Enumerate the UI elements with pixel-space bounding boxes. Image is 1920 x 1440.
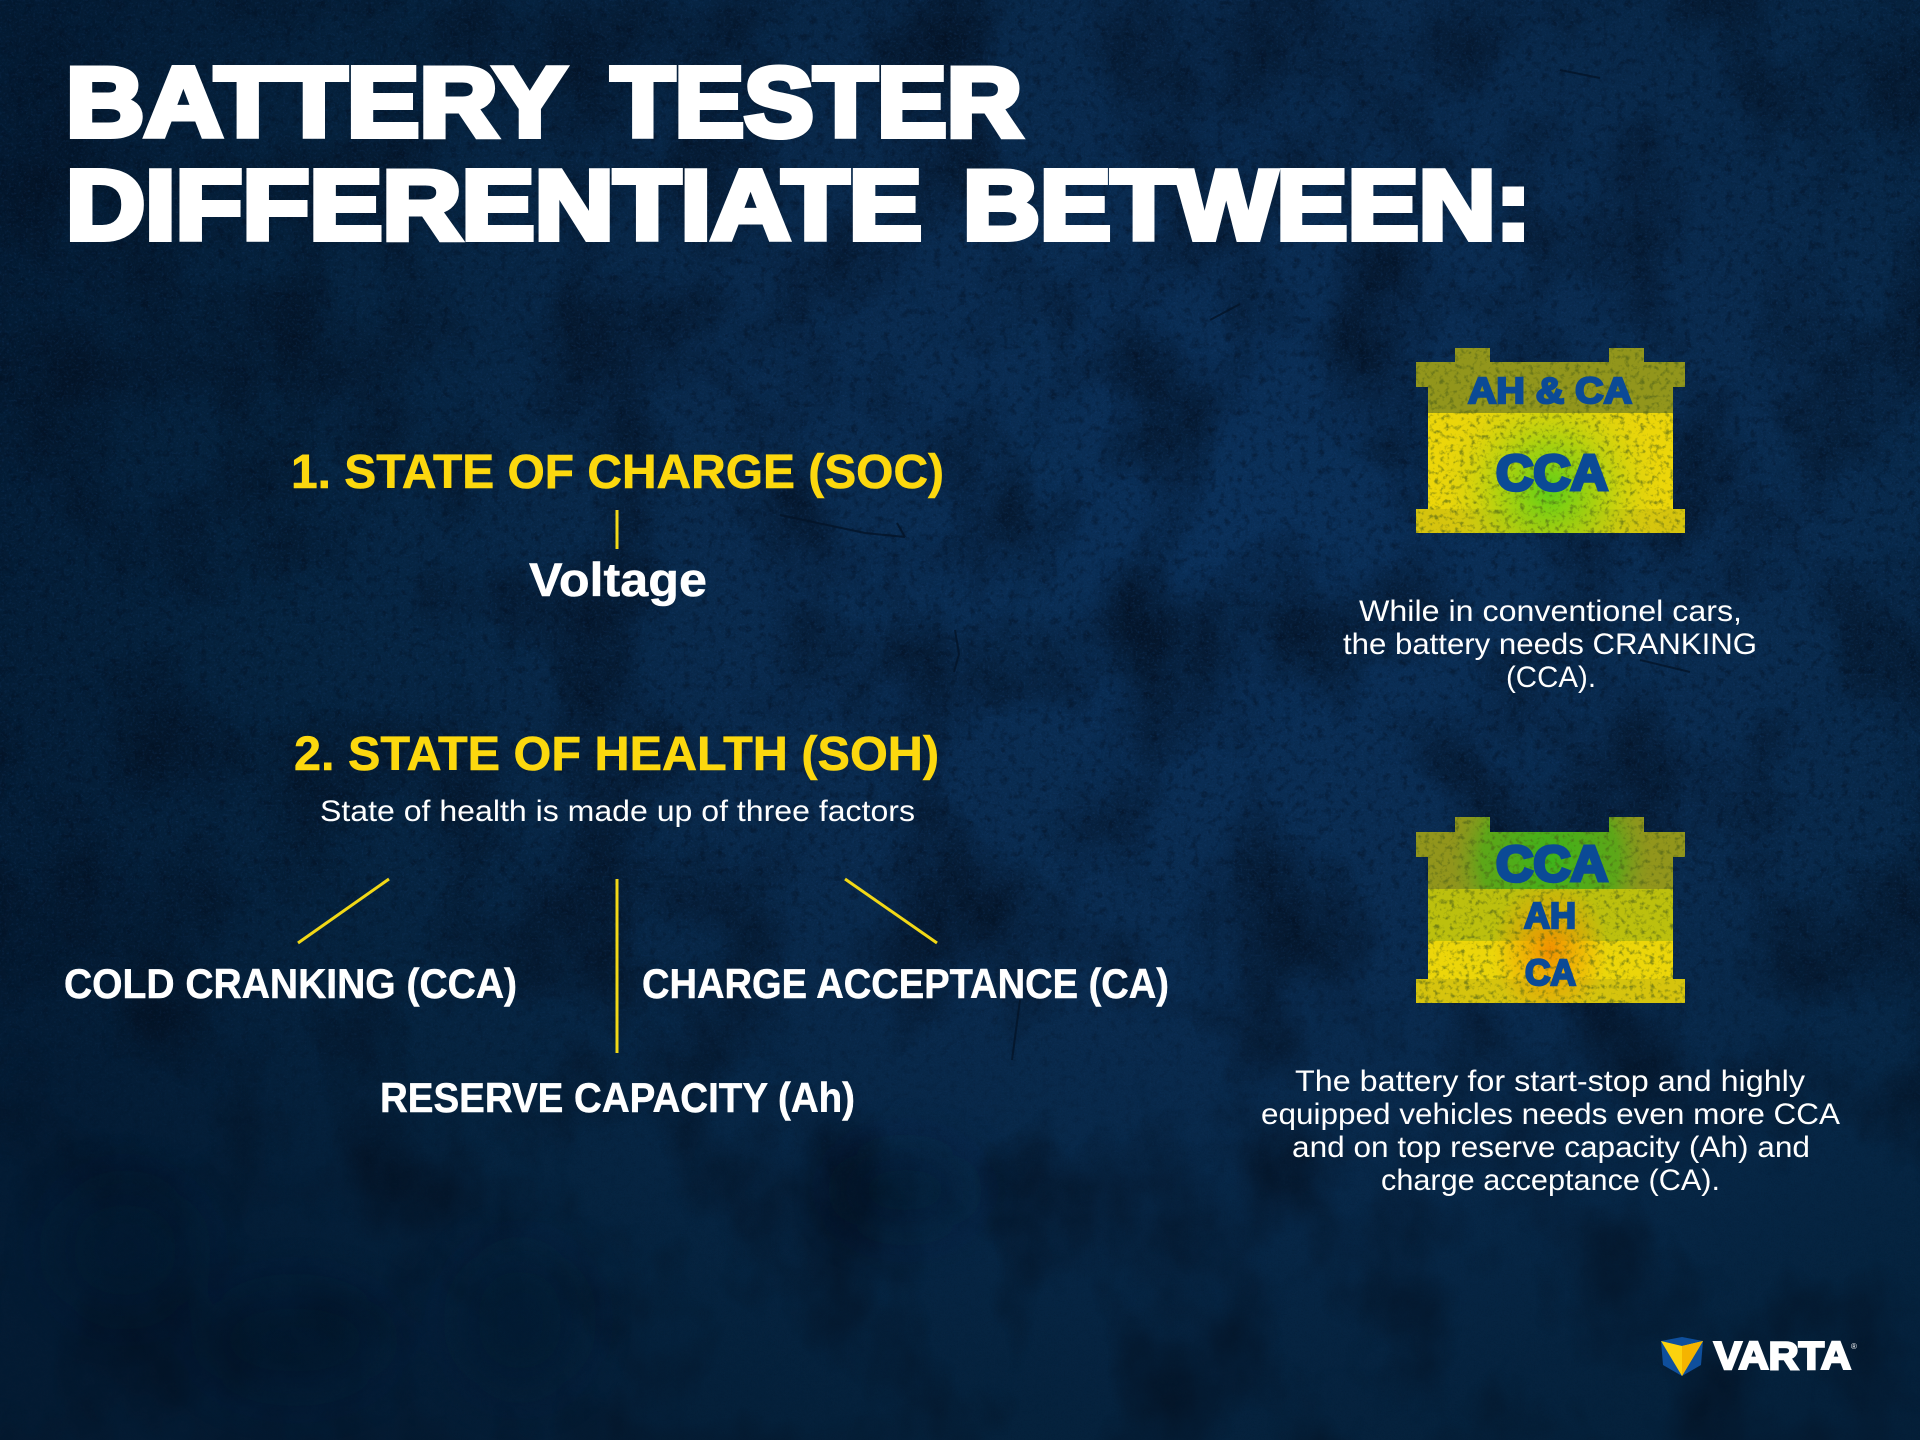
battery label: AH: AH — [1524, 895, 1576, 936]
text: start-stop vehicles: and on top reserve capacity (Ah) and — [1292, 1131, 1810, 1164]
label: reserve capacity: RESERVE CAPACITY (Ah) — [380, 1074, 855, 1121]
logo: VARTA — [1661, 1335, 1857, 1378]
battery label: AH and CA: AH & CA — [1468, 370, 1632, 411]
connector: to reserve capacity — [616, 879, 618, 1053]
connector: charge to voltage — [616, 510, 618, 549]
title: BETWEEN: — [963, 150, 1531, 260]
title: TESTER — [611, 47, 1022, 157]
battery label: CCA: CCA — [1496, 445, 1608, 501]
heading: state of charge: 1. STATE OF CHARGE (SOC) — [291, 446, 944, 499]
text: start-stop vehicles: charge acceptance (CA). — [1381, 1164, 1720, 1197]
text: start-stop vehicles — [1261, 1065, 1840, 1197]
logo: VARTA: VARTA — [1714, 1335, 1851, 1378]
label: cold cranking: COLD CRANKING (CCA) — [64, 960, 517, 1007]
connector: to charge acceptance — [845, 879, 937, 943]
connector: to cold cranking — [298, 879, 389, 943]
text: three factors: State of health is made up of three factors — [320, 795, 915, 828]
text: conventional cars: (CCA). — [1506, 661, 1596, 694]
battery label: CCA: CCA — [1496, 836, 1608, 892]
logo: VARTA: ® — [1851, 1342, 1857, 1351]
title: BATTERY — [66, 47, 566, 157]
text: conventional cars: the battery needs CRANKING — [1343, 628, 1757, 661]
text: conventional cars: While in conventionel cars, — [1359, 595, 1742, 628]
icon: battery start-stop — [1416, 817, 1685, 1003]
battery label: CA: CA — [1525, 952, 1576, 993]
label: voltage: Voltage — [529, 553, 707, 606]
text: conventional cars — [1343, 595, 1757, 694]
icon: battery conventional — [1416, 348, 1685, 533]
label: charge acceptance: CHARGE ACCEPTANCE (CA) — [642, 960, 1169, 1007]
title — [66, 47, 1531, 260]
text: start-stop vehicles: equipped vehicles needs even more CCA — [1261, 1098, 1840, 1131]
title: DIFFERENTIATE — [66, 150, 922, 260]
heading: state of health: 2. STATE OF HEALTH (SOH) — [294, 728, 939, 781]
icon: VARTA shield — [1661, 1337, 1703, 1376]
text: start-stop vehicles: The battery for start-stop and highly — [1295, 1065, 1805, 1098]
